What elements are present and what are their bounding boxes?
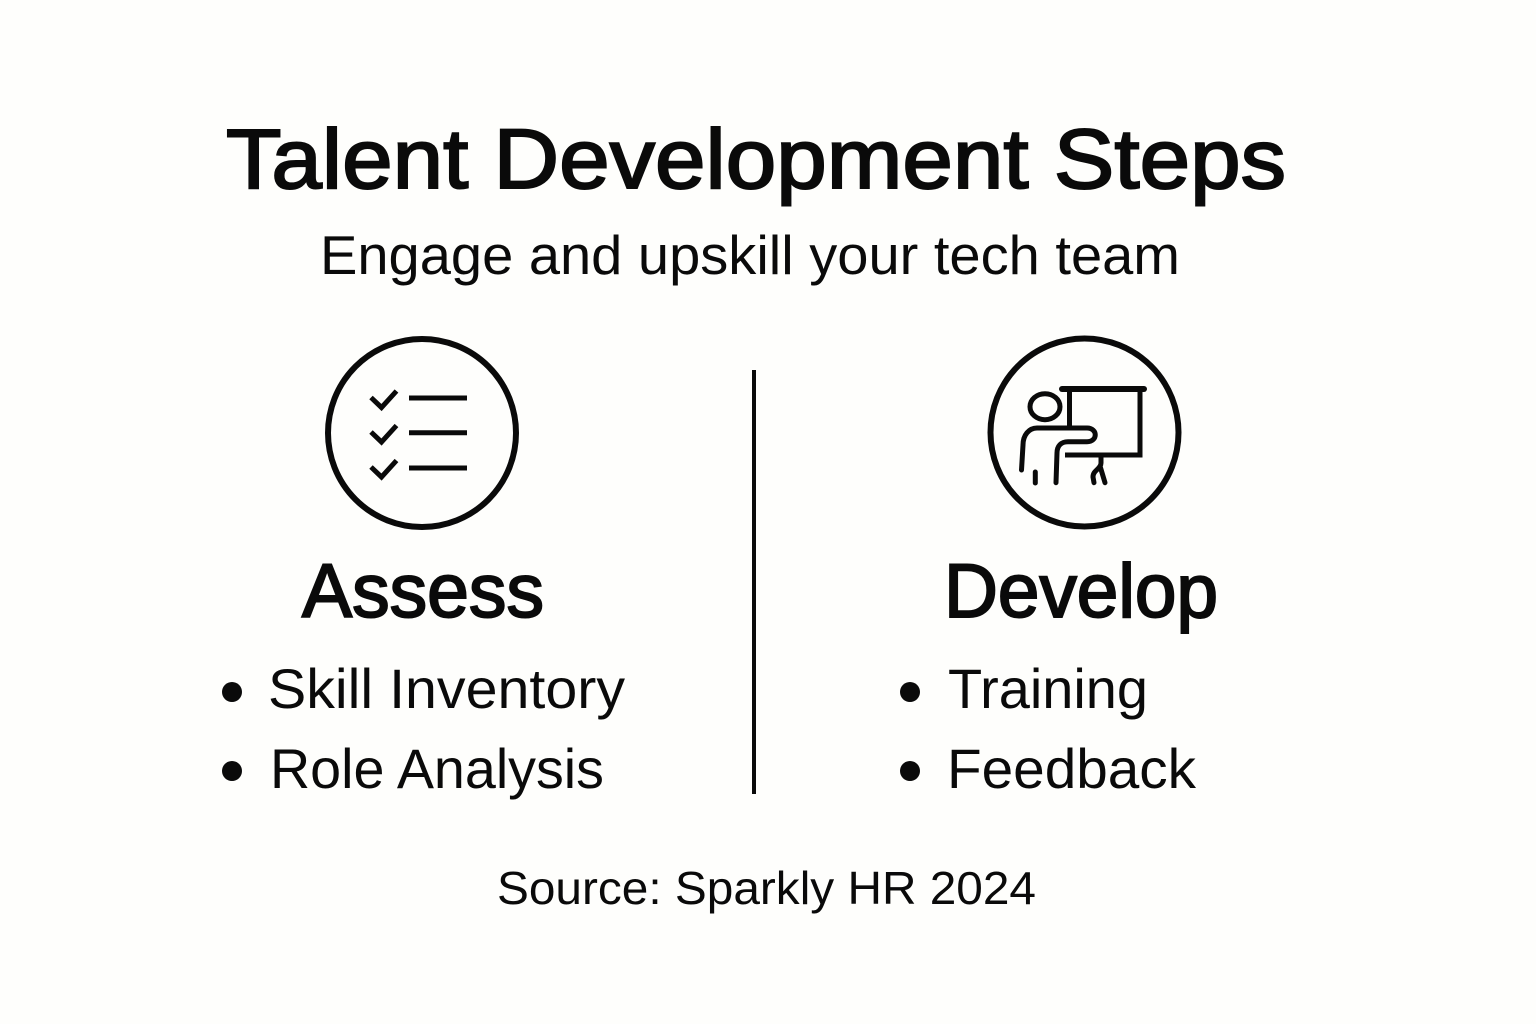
icon: presenter at screen xyxy=(990,338,1178,526)
panel: assess xyxy=(222,339,625,800)
heading: assess: Assess xyxy=(302,549,544,634)
heading: develop: Develop xyxy=(944,549,1218,634)
subtitle: Engage and upskill your tech team xyxy=(320,224,1180,286)
list: develop items xyxy=(900,657,1197,800)
divider xyxy=(752,370,756,794)
list: assess items: Role Analysis xyxy=(270,737,604,800)
title: Talent Development Steps xyxy=(226,112,1286,206)
list: assess items: Skill Inventory xyxy=(268,657,625,720)
list: assess items xyxy=(222,657,625,800)
list: develop items: Training xyxy=(948,657,1148,720)
source note: Source: Sparkly HR 2024 xyxy=(497,862,1036,914)
icon: checklist xyxy=(328,339,516,527)
list: develop items: Feedback xyxy=(947,737,1197,800)
panel: develop xyxy=(900,338,1218,800)
